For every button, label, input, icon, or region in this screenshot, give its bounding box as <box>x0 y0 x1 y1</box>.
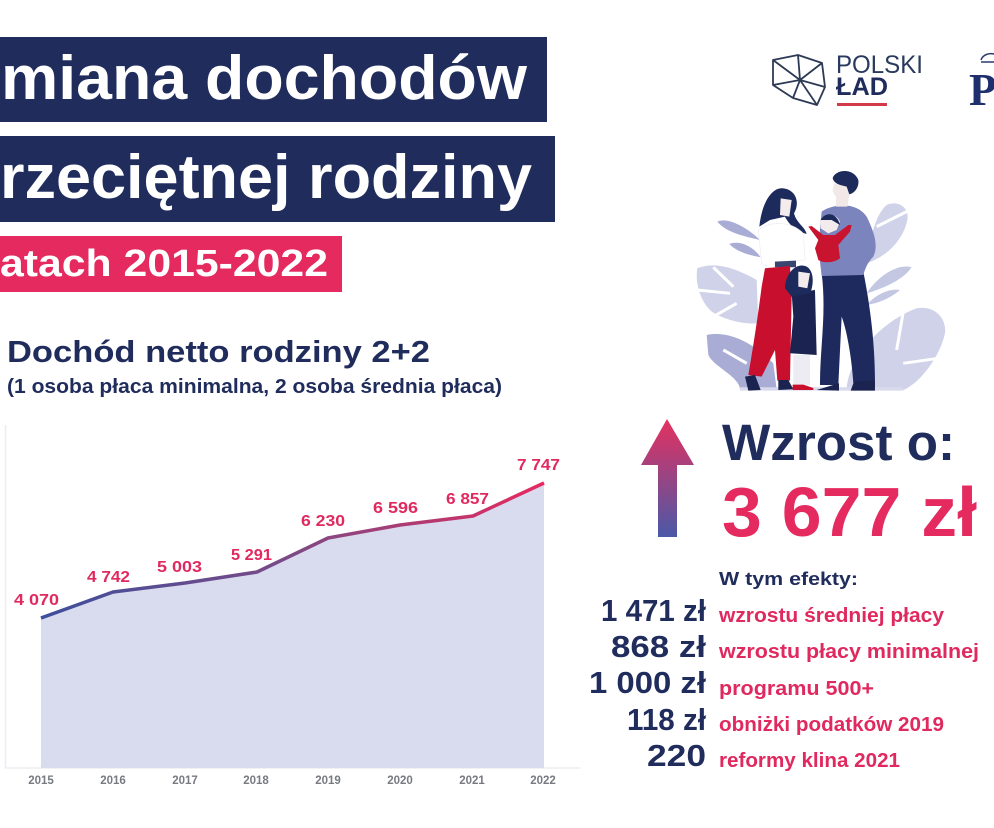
value labels: 6 230 <box>301 513 345 530</box>
arrow: up <box>641 419 694 537</box>
title line 2: rzeciętnej rodziny <box>0 143 533 212</box>
value labels: 4 742 <box>87 569 130 586</box>
title line 3: atach 2015-2022 <box>0 243 328 285</box>
value labels: 5 291 <box>231 547 272 564</box>
breakdown descriptions <box>718 605 979 772</box>
chart subtitle: (1 osoba płaca minimalna, 2 osoba średnia płaca) <box>7 376 502 398</box>
breakdown heading: W tym efekty: <box>719 568 858 589</box>
year labels: 2020 <box>387 775 413 787</box>
value labels: 7 747 <box>517 457 560 474</box>
chart title: Dochód netto rodziny 2+2 <box>7 334 430 369</box>
breakdown list <box>589 568 979 773</box>
year labels: 2017 <box>172 775 198 787</box>
man <box>817 171 876 391</box>
logo wordmark: POLSKI <box>836 51 923 79</box>
value labels <box>14 457 560 609</box>
breakdown amounts: 1 471 zł <box>601 593 706 628</box>
icon: map of Poland <box>773 55 825 105</box>
title line 3 <box>0 236 342 292</box>
year labels: 2018 <box>243 775 269 787</box>
value labels: 6 857 <box>446 491 489 508</box>
breakdown amounts: 118 zł <box>627 702 706 737</box>
breakdown descriptions: wzrostu średniej płacy <box>718 605 945 627</box>
logo wordmark <box>836 51 923 106</box>
value labels: 5 003 <box>157 559 202 576</box>
line <box>41 483 544 618</box>
title line 1: miana dochodów <box>1 44 528 113</box>
year labels: 2015 <box>28 775 54 787</box>
area chart: net family income <box>6 425 580 787</box>
area <box>41 483 544 768</box>
breakdown amounts <box>589 593 706 773</box>
increase value: 3 677 zł <box>722 473 977 551</box>
leaves <box>697 203 945 391</box>
year labels <box>28 775 556 787</box>
increase heading: Wzrost o: <box>722 414 955 471</box>
year labels: 2016 <box>100 775 126 787</box>
breakdown descriptions: reformy klina 2021 <box>719 750 900 772</box>
value labels: 6 596 <box>373 500 418 517</box>
breakdown amounts: 868 zł <box>611 629 706 664</box>
value labels: 4 070 <box>14 592 59 609</box>
chart heading <box>7 334 502 398</box>
breakdown amounts: 1 000 zł <box>589 665 706 700</box>
year labels: 2021 <box>459 775 485 787</box>
baby <box>808 214 852 262</box>
illustration: family <box>697 171 945 391</box>
year labels: 2019 <box>315 775 341 787</box>
logo wordmark: ŁAD <box>836 73 888 101</box>
logo: Polski Ład <box>773 51 923 106</box>
callout: increase <box>722 414 977 551</box>
title <box>0 37 555 292</box>
woman <box>745 188 807 391</box>
breakdown descriptions: obniżki podatków 2019 <box>719 714 944 736</box>
breakdown descriptions: wzrostu płacy minimalnej <box>718 641 979 663</box>
breakdown descriptions: programu 500+ <box>719 678 874 700</box>
year labels: 2022 <box>530 775 556 787</box>
girl <box>785 265 817 390</box>
breakdown amounts: 220 <box>647 738 706 773</box>
